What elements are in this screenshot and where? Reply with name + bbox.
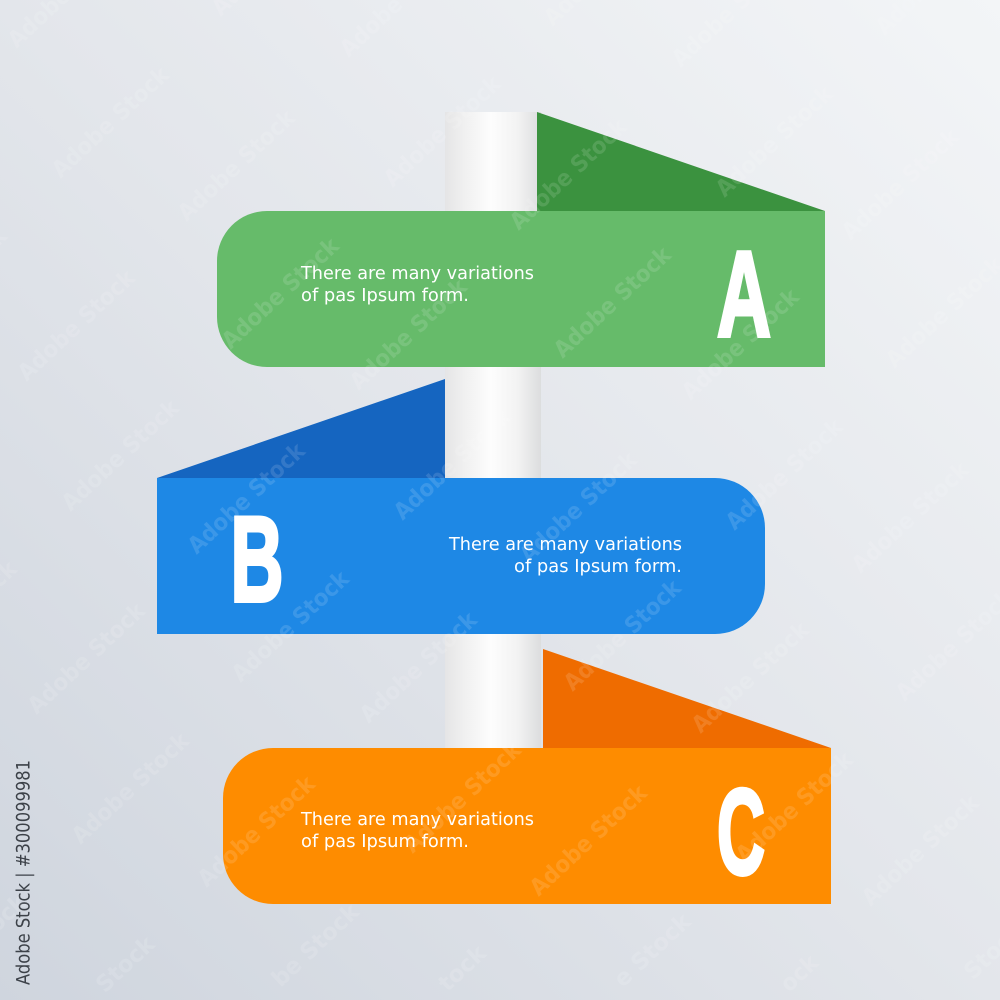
- sign C panel: [223, 748, 831, 904]
- sign B text: There are many variations: [448, 535, 682, 555]
- sign A text: of pas Ipsum form.: [301, 286, 469, 306]
- watermark pattern: Adobe Stock: [559, 575, 687, 696]
- signpost pole: [445, 112, 541, 752]
- watermark pattern: Adobe Stock: [193, 771, 321, 892]
- watermark pattern: Adobe Stock: [721, 414, 849, 535]
- sign B: [157, 379, 765, 634]
- watermark pattern: Adobe Stock: [47, 62, 175, 183]
- watermark pattern: Adobe Stock: [857, 790, 985, 911]
- sign A panel: [217, 211, 825, 367]
- sign A: [217, 112, 825, 367]
- watermark pattern: Adobe Stock: [379, 71, 507, 192]
- watermark pattern: Adobe Stock: [389, 404, 517, 525]
- watermark pattern: Adobe Stock: [525, 780, 653, 901]
- sign C: [223, 649, 831, 904]
- sign B letter: B: [230, 491, 284, 627]
- watermark pattern: ock: [775, 949, 824, 998]
- watermark pattern: e Stock: [609, 908, 697, 993]
- watermark pattern: Adobe Stock: [515, 447, 643, 568]
- watermark pattern: Adobe Stock: [847, 457, 975, 578]
- sign C letter: C: [717, 764, 765, 900]
- sign A text: [300, 264, 534, 306]
- watermark pattern: Adobe Stock: [355, 607, 483, 728]
- watermark pattern: Adobe Stock: [505, 114, 633, 235]
- watermark pattern: Adobe Stock: [345, 274, 473, 395]
- sign B text: [448, 535, 682, 577]
- watermark pattern: Adobe Stock: [677, 284, 805, 405]
- watermark pattern: Adobe Stock: [13, 265, 141, 386]
- sign A text: There are many variations: [300, 264, 534, 284]
- sign C text: of pas Ipsum form.: [301, 832, 469, 852]
- stock id vertical label: Adobe Stock | #300099981: [12, 760, 34, 985]
- watermark pattern: Adobe Stock: [687, 617, 815, 738]
- watermark pattern: Adobe Stock: [217, 233, 345, 354]
- sign C text: [300, 810, 534, 852]
- sign B panel: [157, 478, 765, 634]
- sign B fold: [157, 379, 445, 478]
- watermark pattern: Adobe Stock: [57, 395, 185, 516]
- watermark pattern: Stock: [91, 931, 161, 998]
- sign C text: There are many variations: [300, 810, 534, 830]
- watermark pattern: Adobe Stock: [711, 81, 839, 202]
- watermark pattern: Adobe Stock: [173, 105, 301, 226]
- watermark pattern: Adobe Stock: [67, 728, 195, 849]
- sign A letter: A: [717, 226, 771, 362]
- sign C fold: [543, 649, 831, 748]
- watermark pattern: Adobe Stock: [731, 747, 859, 868]
- watermark pattern: Adobe Stock: [23, 598, 151, 719]
- sign A fold: [537, 112, 825, 211]
- watermark pattern: tock: [434, 940, 492, 997]
- watermark pattern: Adobe Stock: [183, 438, 311, 559]
- watermark pattern: Adobe Stock: [399, 737, 527, 858]
- watermark pattern: Adobe Stock: [227, 566, 355, 687]
- watermark pattern: be Stock: [267, 899, 365, 992]
- watermark pattern: Adobe Stock: [549, 242, 677, 363]
- sign B text: of pas Ipsum form.: [514, 557, 682, 577]
- watermark pattern: Adobe Stock: [837, 124, 965, 245]
